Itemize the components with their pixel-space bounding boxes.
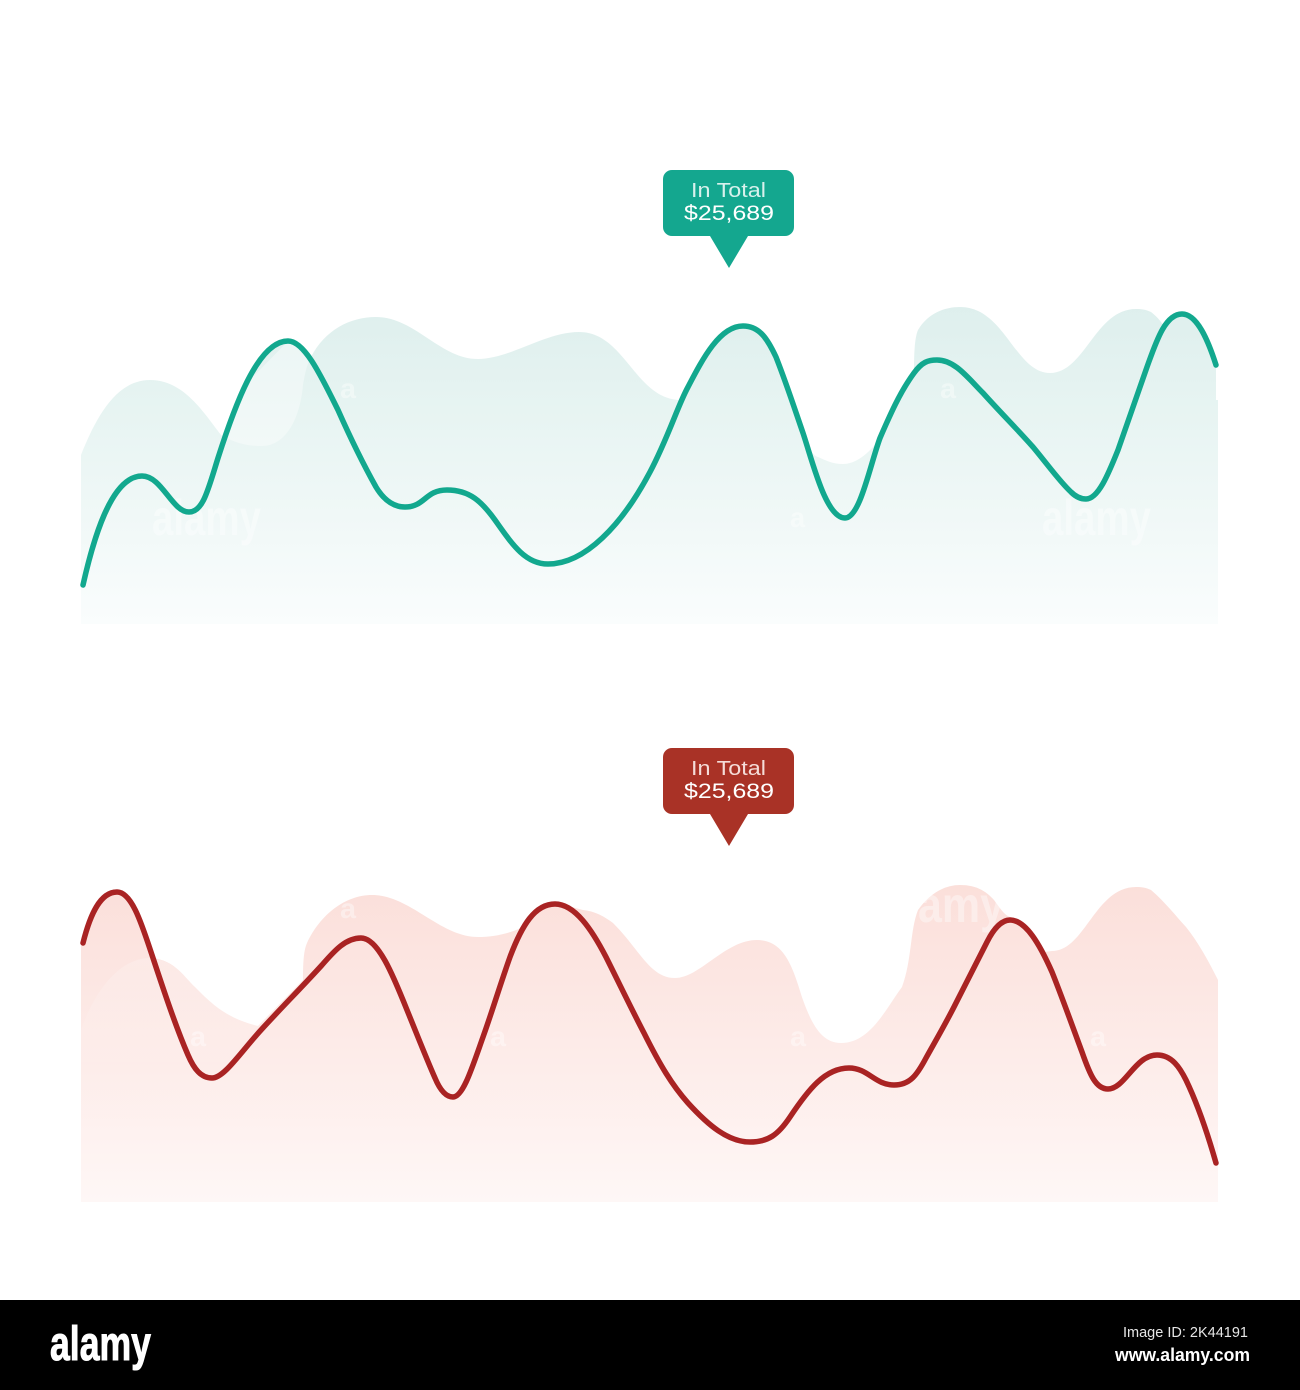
watermark text: green chart: alamy <box>152 490 261 546</box>
watermark text: green chart: a <box>790 502 805 533</box>
watermark text: red chart: a <box>790 1021 806 1052</box>
footer logo: alamy <box>50 1318 151 1371</box>
footer background <box>0 1300 1300 1390</box>
red trend line <box>83 892 1216 1163</box>
green lighter notch under peak <box>222 341 311 446</box>
red area fill <box>81 885 1218 1202</box>
tooltip value: $25,689 <box>684 202 774 225</box>
tooltip shape <box>663 170 794 268</box>
watermark text: red chart: a <box>490 1021 506 1052</box>
tooltip label: In Total <box>691 758 766 780</box>
watermark text: green chart <box>152 373 1151 546</box>
red tooltip callout <box>663 748 794 846</box>
watermark text: red chart <box>190 877 1106 1052</box>
watermark text: red chart: a <box>1090 1021 1106 1052</box>
tooltip shape <box>663 748 794 846</box>
green trend line <box>83 314 1216 585</box>
watermark text: green chart: a <box>940 373 956 404</box>
tooltip value: $25,689 <box>684 780 774 803</box>
tooltip label: In Total <box>691 180 766 202</box>
footer bar <box>0 1300 1300 1390</box>
image id: Image ID: 2K44191 <box>1123 1324 1248 1341</box>
green tooltip callout <box>663 170 794 268</box>
watermark text: green chart: a <box>340 373 356 404</box>
website: www.alamy.com <box>1114 1345 1250 1365</box>
panel: red chart <box>81 748 1218 1202</box>
watermark text: red chart: amy <box>918 877 1004 933</box>
panel: green chart <box>81 170 1218 624</box>
green area fill <box>81 307 1218 624</box>
watermark text: red chart: a <box>340 893 356 924</box>
watermark text: green chart: alamy <box>1042 490 1151 546</box>
red inner hump overlay <box>81 958 258 1078</box>
watermark text: red chart: a <box>190 1021 206 1052</box>
